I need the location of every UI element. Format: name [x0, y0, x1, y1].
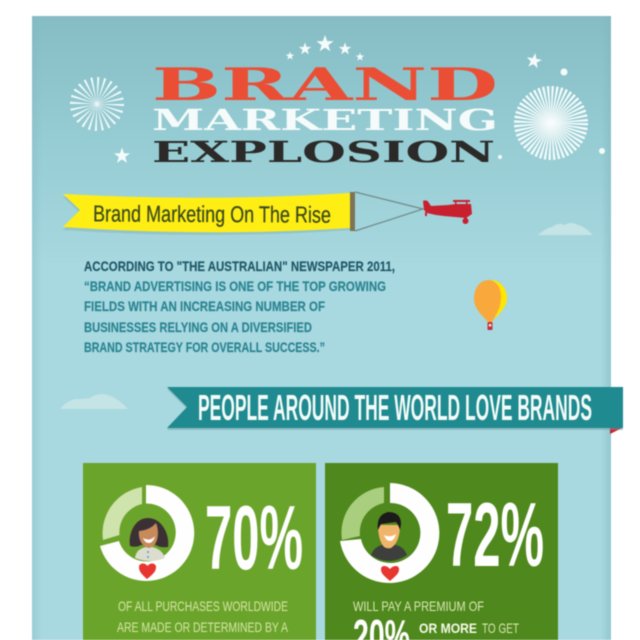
stat description: WILL PAY A PREMIUM OF [353, 598, 484, 614]
stat description [353, 598, 519, 640]
stat description: ARE MADE OR DETERMINED BY A [117, 619, 288, 635]
icon: woman avatar [130, 518, 168, 561]
title: EXPLOSION [152, 135, 495, 169]
yellow banner heading: Brand Marketing On The Rise [93, 200, 331, 228]
title [152, 58, 498, 169]
donut chart: 72 percent [340, 483, 439, 583]
icon: tow pole and ropes [350, 192, 423, 231]
icon: stars and dots [114, 35, 605, 163]
quote text block [84, 258, 395, 355]
stat description [117, 598, 288, 635]
stat: 72%: 72% [446, 485, 544, 586]
icon: hot air balloon [474, 280, 507, 330]
icon: left firework [81, 88, 113, 120]
icon: man avatar [371, 512, 407, 561]
icon: heart [139, 563, 156, 579]
icon: right firework [527, 99, 575, 147]
stat: 70%: 70% [205, 488, 303, 589]
panel: 72 percent stat [325, 463, 558, 640]
stat description: OR MORE [419, 620, 477, 636]
quote text block: FIELDS WITH AN INCREASING NUMBER OF [84, 298, 325, 314]
stat description: OF ALL PURCHASES WORLDWIDE [118, 598, 288, 614]
title: MARKETING [152, 103, 498, 137]
panel: 70 percent stat [83, 463, 316, 640]
icon: cloud left [60, 394, 128, 409]
quote text block: “BRAND ADVERTISING IS ONE OF THE TOP GROWING [84, 278, 386, 294]
stat description: TO GET [482, 620, 519, 636]
quote text block: BUSINESSES RELYING ON A DIVERSIFIED [84, 319, 312, 335]
donut chart: 70 percent [100, 485, 194, 581]
icon: cloud upper right [538, 223, 593, 235]
title: BRAND [152, 58, 498, 111]
quote text block: BRAND STRATEGY FOR OVERALL SUCCESS.” [84, 339, 325, 355]
yellow banner heading [63, 193, 350, 235]
icon: heart [381, 566, 399, 581]
icon: red biplane [423, 200, 472, 224]
quote text block: ACCORDING TO "THE AUSTRALIAN" NEWSPAPER 2011, [84, 258, 395, 274]
